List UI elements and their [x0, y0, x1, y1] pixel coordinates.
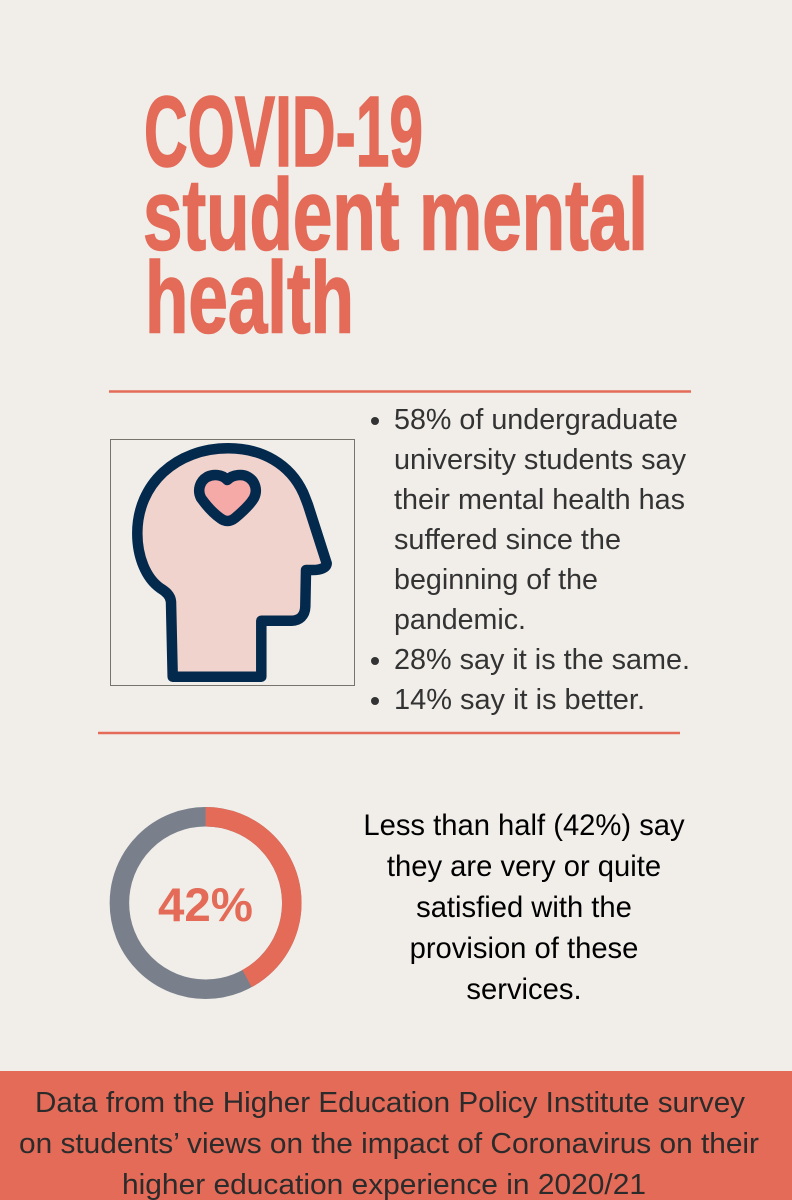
bullet list: 14% say it is better.	[394, 684, 645, 716]
bullet list: pandemic.	[394, 604, 526, 636]
footer source text: Data from the Higher Education Policy Institute survey	[35, 1087, 746, 1119]
satisfaction statement	[363, 810, 685, 1006]
bullet list	[371, 404, 690, 716]
title	[143, 76, 648, 354]
footer source text	[19, 1087, 759, 1200]
footer band	[0, 1071, 792, 1200]
satisfaction statement: satisfied with the	[416, 892, 632, 924]
donut chart: 42%: 42%	[158, 878, 253, 931]
bullet list: 28% say it is the same.	[394, 644, 690, 676]
footer source text: on students’ views on the impact of Coronavirus on their	[19, 1128, 759, 1160]
icon: head with heart	[110, 440, 354, 686]
satisfaction statement: Less than half (42%) say	[363, 810, 685, 842]
title: health	[145, 242, 354, 354]
satisfaction statement: services.	[466, 974, 582, 1006]
bullet list: 58% of undergraduate	[394, 404, 678, 436]
title: COVID-19	[144, 76, 423, 188]
bullet list: university students say	[394, 444, 687, 476]
satisfaction statement: they are very or quite	[387, 851, 661, 883]
donut chart: 42%	[119, 817, 292, 989]
bullet list: suffered since the	[394, 524, 621, 556]
icon: heart	[199, 475, 256, 521]
bullet list: their mental health has	[394, 484, 685, 516]
bullet list: beginning of the	[394, 564, 598, 596]
satisfaction statement: provision of these	[410, 933, 638, 965]
